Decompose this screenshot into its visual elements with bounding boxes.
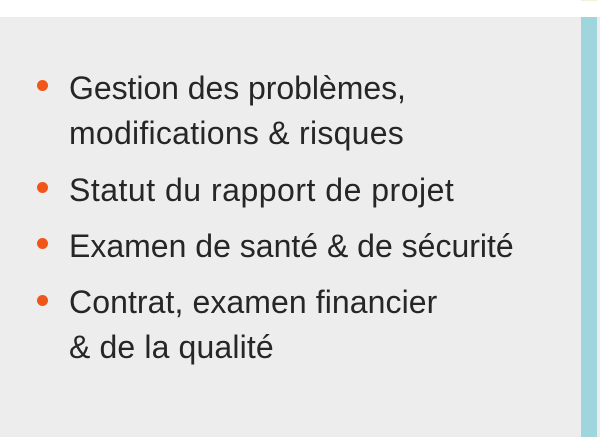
text: project report: Statut du rapport de projet (69, 172, 454, 208)
text: issues, changes: Gestion des problèmes, (69, 70, 406, 106)
top tint above side bar (581, 0, 597, 1)
bullet: health and safety (37, 238, 48, 249)
text: health and safety: Examen de santé & de sécurité (69, 228, 514, 264)
teal side bar (581, 17, 597, 437)
bullet: issues (37, 80, 48, 91)
bullet: report (37, 182, 48, 193)
text: modifications and risks: modifications & risques (69, 115, 404, 151)
text: contract and finance: Contrat, examen financier (69, 284, 437, 320)
text: quality: & de la qualité (69, 329, 274, 365)
bullet: contract (37, 295, 48, 306)
